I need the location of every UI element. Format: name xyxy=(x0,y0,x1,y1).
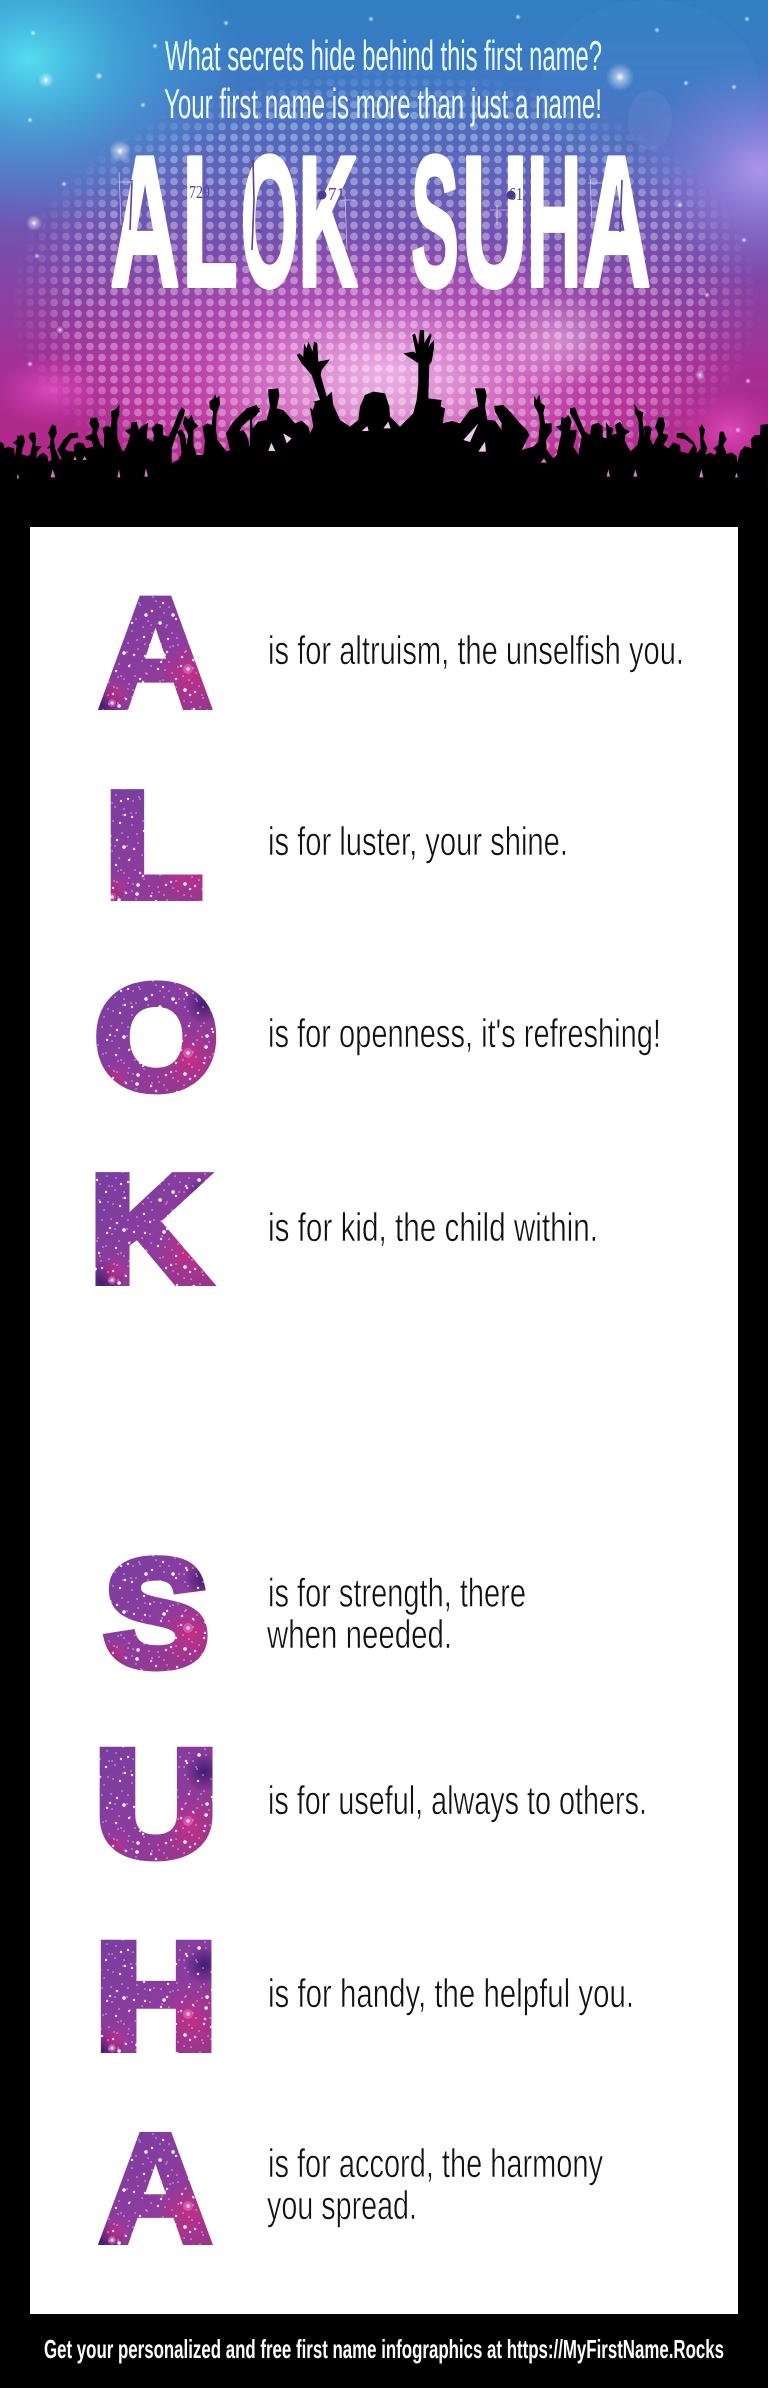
row: U is for useful: U xyxy=(95,1719,217,1887)
row: A is for accord: you spread. xyxy=(267,2184,417,2228)
row: S is for strength: is for strength, there xyxy=(268,1572,526,1616)
title: ALOK SUHA: L xyxy=(182,117,238,326)
row: A is for accord xyxy=(99,2102,603,2274)
row: K is for kid xyxy=(90,1144,598,1313)
row: A is for accord: is for accord, the harmony xyxy=(268,2142,603,2186)
title: ALOK SUHA: K xyxy=(298,117,358,326)
title: ALOK SUHA: H xyxy=(527,117,582,326)
title: ALOK SUHA: A xyxy=(110,117,180,326)
row: S is for strength: S xyxy=(104,1529,208,1697)
row: H is for handy: is for handy, the helpful you. xyxy=(268,1972,634,2016)
row: K is for kid: K xyxy=(90,1144,207,1313)
title grunge marks xyxy=(118,160,622,250)
title grunge marks: 61 xyxy=(509,184,523,204)
heading: tagline xyxy=(164,32,602,127)
title grunge marks: 71 xyxy=(328,184,345,204)
row: S is for strength xyxy=(104,1529,526,1697)
crowd silhouette xyxy=(0,330,768,513)
row: L is for luster: is for luster, your shine. xyxy=(268,820,568,864)
row: H is for handy: H xyxy=(95,1912,217,2080)
title: ALOK SUHA xyxy=(110,117,651,326)
row: L is for luster xyxy=(106,763,568,928)
title grunge marks: 729 xyxy=(189,182,210,202)
title: ALOK SUHA: U xyxy=(462,117,528,326)
row: A is for altruism: A xyxy=(99,566,212,740)
title: ALOK SUHA: O xyxy=(241,117,298,326)
title: ALOK SUHA: A xyxy=(582,117,651,326)
row: O is for openness xyxy=(95,956,661,1120)
panel: white letter panel xyxy=(30,527,738,2314)
row: A is for accord: A xyxy=(99,2102,212,2274)
row: H is for handy xyxy=(95,1912,634,2080)
row: U is for useful xyxy=(95,1719,647,1887)
header: concert scene background xyxy=(0,0,768,510)
title: ALOK SUHA: S xyxy=(411,117,459,326)
row: A is for altruism xyxy=(99,566,684,740)
row: K is for kid: is for kid, the child within. xyxy=(268,1206,598,1250)
row: S is for strength: when needed. xyxy=(266,1613,452,1657)
row: L is for luster: L xyxy=(106,763,202,928)
row: O is for openness: O xyxy=(95,956,217,1120)
star glints xyxy=(26,14,751,433)
